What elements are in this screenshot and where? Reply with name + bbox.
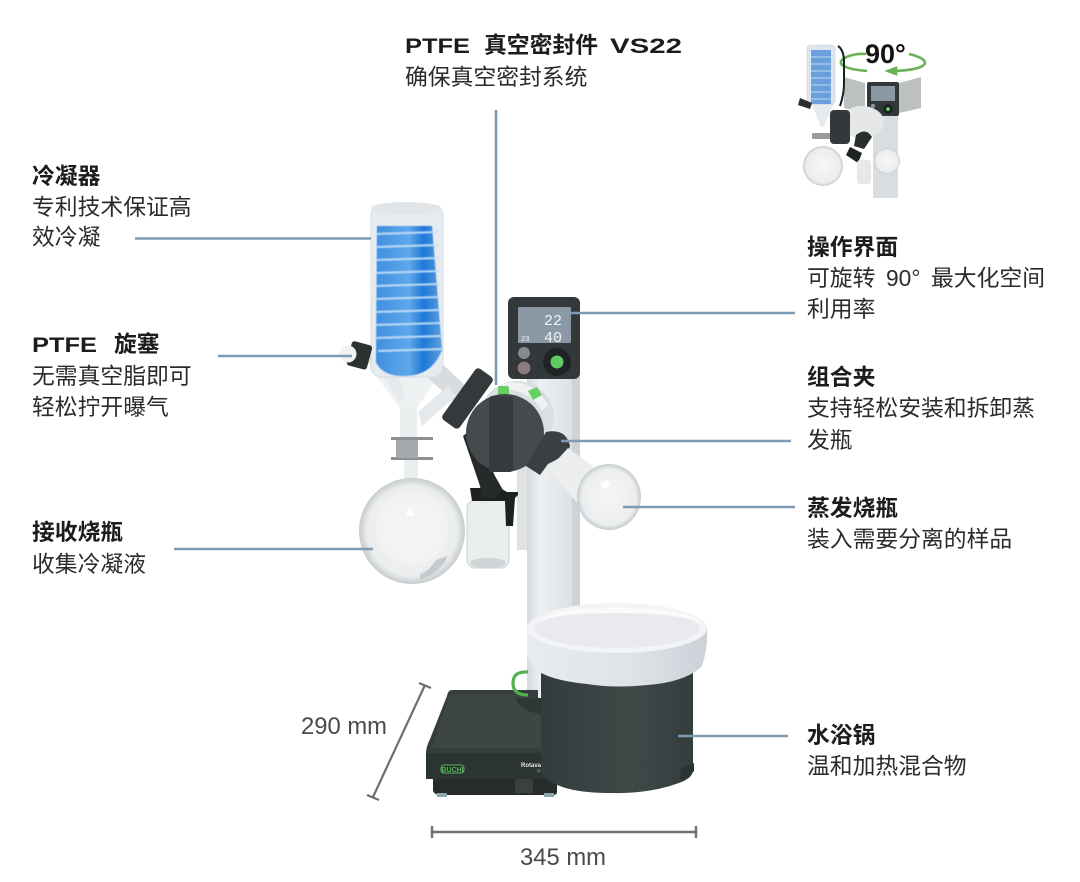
label: combi clamp: [807, 364, 1035, 453]
label: evaporating flask: 装入需要分离的样品: [807, 526, 1012, 552]
ghost panels: [844, 77, 921, 113]
green handle: [513, 672, 528, 695]
label: receiving flask: [32, 519, 146, 577]
label: PTFE vacuum seal VS22: 确保真空密封系统: [405, 64, 587, 90]
label: PTFE vacuum seal VS22: VS22: [610, 35, 682, 58]
label: interface: 90°: [886, 265, 920, 291]
evaporating flask: [548, 448, 641, 530]
stopcock: [340, 341, 373, 370]
label: PTFE vacuum seal VS22: [405, 32, 682, 90]
support column: [517, 375, 580, 710]
label: PTFE stopcock: [32, 331, 192, 420]
label: combi clamp: 支持轻松安装和拆卸蒸: [807, 395, 1035, 421]
inset panel: [867, 82, 899, 116]
label: PTFE stopcock: 轻松拧开曝气: [32, 394, 169, 420]
label: evaporating flask: [807, 495, 1012, 552]
label: interface: 最大化空间: [931, 265, 1045, 291]
label: interface: [807, 234, 1045, 322]
inset condenser: [798, 45, 844, 139]
label: PTFE vacuum seal VS22: PTFE: [405, 35, 470, 58]
label: PTFE stopcock: PTFE: [32, 334, 97, 357]
label: water bath: 水浴锅: [807, 722, 875, 748]
label: receiving flask: 接收烧瓶: [32, 519, 123, 545]
inset flask: [803, 146, 843, 186]
receiving flask: [359, 478, 465, 584]
rotary evaporator photo: [340, 202, 707, 797]
callout lines: [135, 110, 795, 736]
label: PTFE stopcock: 无需真空脂即可: [32, 363, 192, 389]
receiving bottle: [467, 488, 518, 568]
dimension: depth 290 mm: [301, 683, 431, 800]
label: PTFE vacuum seal VS22: 真空密封件: [484, 32, 598, 58]
dimension: width 345 mm: 345 mm: [520, 844, 606, 871]
water bath: [527, 603, 707, 793]
label: receiving flask: 收集冷凝液: [32, 551, 146, 577]
inset: 90 degree rotation: [798, 39, 925, 198]
label: combi clamp: 组合夹: [807, 364, 876, 390]
readout: 22: [544, 313, 562, 330]
model label: R-80: [537, 769, 548, 775]
label: condenser: [32, 163, 192, 250]
label: condenser: 冷凝器: [32, 163, 101, 189]
rotary drive head: [441, 367, 570, 498]
label: PTFE stopcock: 旋塞: [114, 331, 160, 357]
label: evaporating flask: 蒸发烧瓶: [807, 495, 898, 521]
label: interface: 利用率: [807, 296, 875, 322]
inset angle label: 90°: [865, 39, 906, 69]
model label: [521, 763, 551, 775]
label: interface: 可旋转: [807, 265, 875, 291]
inset column: [873, 112, 898, 198]
inset bottle: [857, 160, 871, 184]
label: water bath: [807, 722, 967, 779]
inset rotation arrow: [841, 54, 925, 74]
power switch: [515, 779, 533, 793]
model label: Rotavapor: [521, 763, 551, 769]
readout: 40: [544, 330, 562, 347]
control panel: [508, 297, 580, 379]
label: condenser: 效冷凝: [32, 224, 101, 250]
condenser and glassware: [340, 202, 466, 584]
logo: BUCHI: [441, 767, 464, 774]
label: interface: 操作界面: [807, 234, 898, 260]
readout: 23: [521, 336, 529, 344]
dimension: depth 290 mm: 290 mm: [301, 713, 387, 740]
label: condenser: 专利技术保证高: [32, 194, 192, 220]
inset evaporating flask: [874, 148, 900, 174]
label: combi clamp: 发瓶: [807, 427, 853, 453]
base plate: [426, 690, 568, 797]
inset head: [830, 106, 884, 163]
clamp: [391, 437, 433, 460]
label: water bath: 温和加热混合物: [807, 753, 967, 779]
readout: [521, 313, 562, 347]
